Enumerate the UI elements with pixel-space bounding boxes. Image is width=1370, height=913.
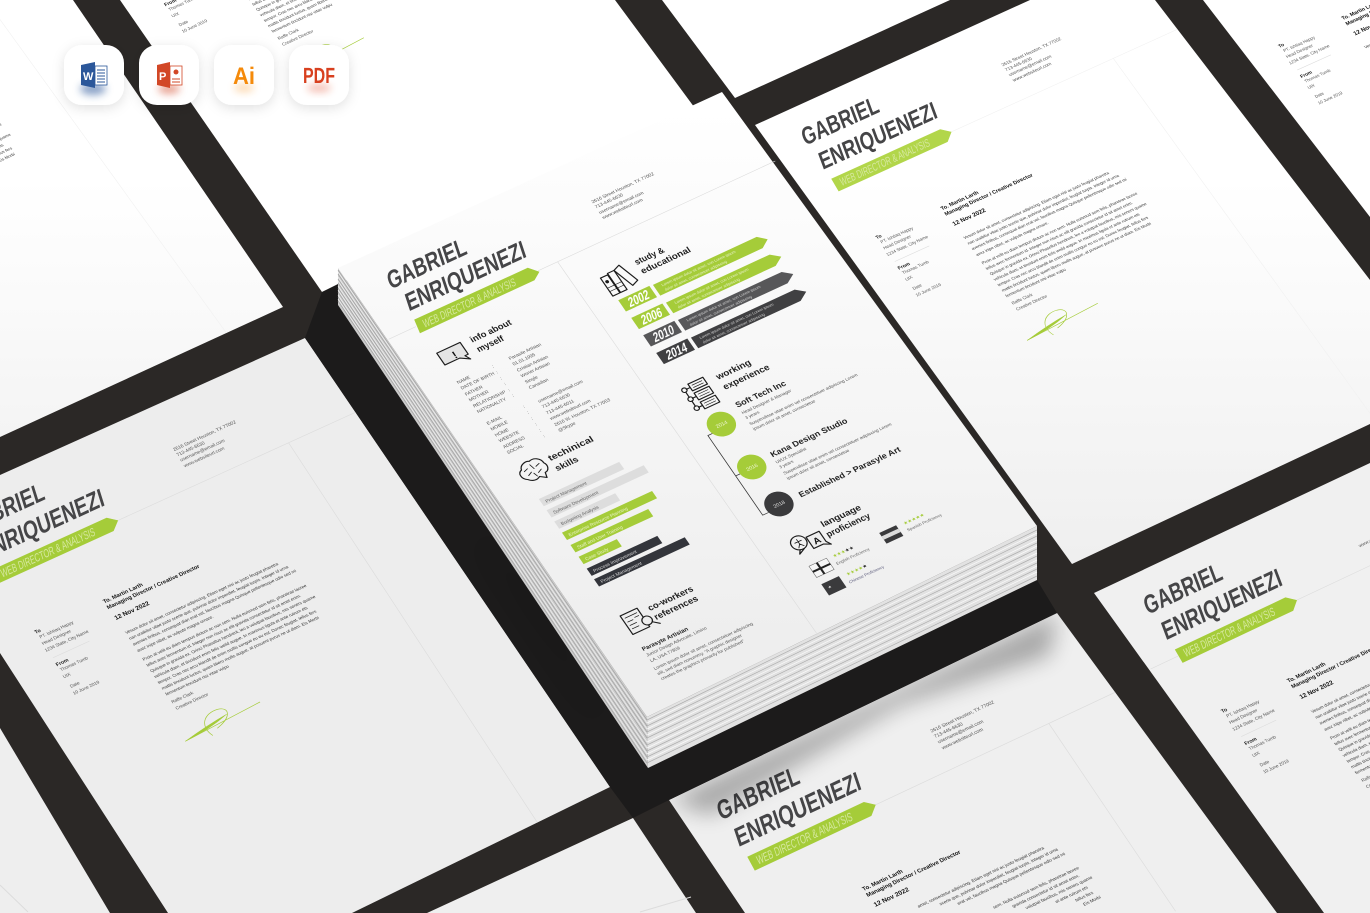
personal details list: NATIONALITY [476, 397, 508, 414]
heading: info about myself [468, 317, 521, 354]
reference entry: Parasyte Artisian [640, 626, 689, 652]
letter sheet: left: 1234 State, City Name [44, 629, 90, 653]
icon: books [598, 262, 640, 296]
experience 2016: UI/UX Specialist [775, 447, 808, 465]
icon: speech bubble alert [437, 342, 471, 369]
letter sheet: top right: PT. Ishtiaq Happy [880, 226, 915, 245]
letter sheet: left [0, 351, 606, 913]
letter sheet: left: avez inipe nibet, ac vulpute magna ornare. [136, 615, 215, 653]
education timeline 2002: Lorem ipsum dolor sit amet, con Lorem ipsum [661, 249, 737, 288]
letter sheet: bottom right: 10 June 2019 [1262, 759, 1290, 775]
letter sheet: top right: 1234 State, City Name [886, 235, 929, 257]
heading: study and educational [632, 236, 693, 276]
contact details list: 713-445-6630 [541, 393, 571, 409]
contact details list [486, 373, 615, 456]
contact details list: @Skype [557, 421, 577, 433]
personal details list: MOTHER [468, 390, 490, 403]
letter sheet: bottom center: erat vel, faucibus magna Quisque pellentesque odio sed mi [956, 852, 1066, 906]
letter sheet: bottom center: To. Martin Larth [861, 868, 904, 892]
letter sheet: top right: vehicula diam, et tincidunt enim felis weild augue. In maximus ligula et ante rutrum ets [993, 212, 1141, 282]
letter sheet: top right: To. Martin Larth [939, 190, 980, 211]
education timeline 2014: 2014 [664, 340, 689, 363]
experience 2016: Suspendisse vitae enim vel consectetuer adipiscing Lorem [783, 422, 893, 476]
letter sheet: top right: username@email.com [1008, 54, 1053, 77]
contact address [590, 172, 666, 221]
contact address: www.websiteurl.com [601, 198, 644, 221]
role banner: WEB DIRECTOR & ANALYSIS [421, 276, 517, 330]
letter sheet: bottom center [706, 628, 1244, 913]
letter sheet: top right: Raffe Clark [1011, 293, 1034, 306]
letter sheet: top left: UIX [171, 12, 181, 19]
education timeline 2002 [618, 233, 772, 313]
letter sheet: top left: Creative Director [281, 29, 315, 47]
letter sheet: bottom right: UIX [1251, 751, 1261, 758]
name title: GABRIEL [383, 232, 470, 295]
letter sheet: left: Quisque in gravida ex. Orinci Phasellus hendrerit, leo a volutpat faucibus, mis seners quame [149, 594, 317, 674]
language: spanish [879, 506, 943, 544]
icon: document search [620, 604, 660, 636]
letter sheet: top right: www.websiteurl.com [1011, 62, 1053, 83]
reference entry: Junior Design Advocate, Limino [645, 626, 708, 658]
name title [376, 212, 536, 318]
personal details list: Cristian Artisian [516, 355, 549, 373]
letter sheet: left: From [54, 657, 70, 668]
heading: language proficiency [817, 501, 873, 539]
language: spanish: ★★★★★ [902, 512, 926, 526]
letter sheet: bottom center: volutpat faucibus, mis seners quame [1025, 875, 1094, 911]
resume content [350, 105, 1033, 714]
skill bars: Software Development [552, 491, 600, 515]
letter sheet: bottom right: To. Martin Larth [1286, 661, 1327, 684]
letter sheet: bottom center: Managing Director / Creative Director [865, 849, 962, 898]
contact details list: MOBILE [490, 420, 509, 432]
letter sheet: bottom right: GABRIEL [1140, 557, 1226, 620]
letter sheet: left: vehicula diam, et tincidunt enim felis weild augue. In maximus ligula et ante rutrum ets [153, 606, 309, 679]
letter sheet: bottom center: WEB DIRECTOR & ANALYSIS [755, 810, 854, 867]
reference entry: creates the graphics primarily for published" [660, 639, 746, 681]
skill bars: Project Management [600, 561, 643, 584]
letter sheet: top right: avez inipe nibet, ac vulpute magna ornare. [975, 221, 1050, 257]
education timeline 2006 [631, 250, 786, 330]
letter sheet: far top right: Head Designer [1285, 43, 1315, 59]
education timeline 2010: 2010 [651, 322, 676, 346]
personal details list: Woner Artisian [520, 361, 551, 379]
personal details list: DATE OF BIRTH [460, 371, 496, 391]
letter sheet: left: 2616 Street Houston, TX 77002 [172, 420, 237, 452]
letter sheet: left: 713-445-6630 [176, 441, 206, 458]
stack shadow on surrounding sheets [480, 540, 1057, 815]
letter sheet: left: mattis tincidunt luctus, quam libero mollis augue, at posuere purus ne ut diam. Eis Morbi [161, 616, 320, 691]
letter sheet: top right: avenies finibus, consequat dian erat vel, faucibus magna Quisque pellentesque odio sed mi [971, 177, 1128, 251]
letter sheet: top right: From [896, 261, 912, 271]
contact address: username@email.com [598, 191, 645, 215]
letter sheet: left: Thomas Tumb [59, 656, 89, 672]
letter sheet: bottom right: Date [1259, 760, 1271, 768]
heading: language proficiency: proficiency [824, 511, 873, 539]
personal details list [456, 342, 563, 414]
contact details list: ADDRESS [502, 436, 526, 450]
letter sheet: far top right: 10 June 2019 [1317, 91, 1344, 106]
education timeline 2002: 2002 [626, 287, 651, 311]
heading: study and educational: educational [638, 245, 693, 276]
personal details list: : [495, 370, 499, 375]
letter sheet: top right: To [874, 233, 883, 240]
skill bars: Process Improvement [593, 550, 638, 574]
language: chinese: ★★★★★ [845, 563, 868, 577]
role banner [412, 265, 542, 333]
personal details list: RELATIONSHIP [472, 390, 507, 409]
letter sheet: top right: 12 Nov 2022 [951, 207, 987, 227]
letter sheet: left: Proin at velit eu diam tempus dictum ac non sem. Nulla euismod sem felis, pharetrae laoree [142, 583, 308, 662]
letter sheet: left: username@email.com [179, 438, 226, 463]
letter sheet: top right: tellus avec fermentum id. Integer non risus ac elit gravida consectetur id sit amet enim. [985, 201, 1134, 271]
letter sheet: top right: UIX [904, 275, 914, 282]
education timeline 2006: Lorem ipsum dolor sit amet, con Lorem ipsum [674, 267, 750, 305]
experience 2014: 3 years [744, 410, 761, 420]
letter sheet: top right: ENRIQUENEZI [815, 97, 941, 175]
heading: co-workers references [645, 584, 701, 622]
education timeline 2010: Lorem ipsum dolor sit amet, con Lorem ipsum [686, 285, 762, 323]
letter sheet: bottom right: ENRIQUENEZI [1158, 563, 1286, 645]
skill bars: Enterprise Resource Planning [568, 507, 629, 538]
personal details list: : [511, 394, 515, 398]
contact address: 2616 Street Houston, TX 77002 [591, 172, 655, 205]
letter sheet: top right: 713-445-6630 [1004, 57, 1033, 72]
letter sheet: bottom right: PT. Ishtiaq Happy [1225, 699, 1261, 719]
letter sheet: far top right: PT. Ishtiaq Happy [1282, 35, 1317, 53]
letter sheet: top right: nan uraibitur vitae justo scerie que, pulvinar dolor imperdiet, feugiat turpis. Integer id urna [967, 173, 1120, 246]
contact details list: E-MAIL [486, 415, 503, 426]
letter sheet: left: Head Designer [41, 629, 73, 646]
letter sheet: top right: 10 June 2019 [915, 283, 942, 298]
letter sheet: left: tellus avec fermentum id. Integer non risus ac elit gravida consectetur id sit amet enim. [146, 594, 302, 668]
experience 2016: 2016 [745, 462, 759, 472]
letter sheet: bottom center: sem. Nulla euismod sem felis, pharetrae laoree [992, 866, 1081, 910]
letter sheet: bottom right: 1234 State, City Name [1232, 708, 1276, 732]
letter sheet: left: UIX [62, 672, 72, 679]
experience 2016: ipsum dolor sit amet, consectetue [786, 448, 851, 481]
heading: working experience: working [713, 357, 753, 382]
experience 2018 [759, 437, 907, 521]
personal details list: FATHER [464, 385, 484, 397]
contact details list: : [530, 417, 534, 421]
heading: study and educational: study & [632, 245, 666, 267]
experience 2014: Suspendisse vitae enim vel consectetuer adipiscing Lorem [749, 373, 859, 427]
letter sheet: bottom center: ENRIQUENEZI [731, 766, 864, 853]
letter sheet: top left: 10 June 2019 [181, 19, 209, 34]
letter sheet: bottom right [1144, 540, 1370, 788]
reference entry: LA, USA 77809 [649, 646, 681, 663]
letter sheet: left: 12 Nov 2022 [113, 600, 151, 621]
contact address: 713-445-6630 [594, 193, 624, 210]
letter sheet: bottom center: gravida consectetur id sit amet enim. [1011, 873, 1081, 909]
reference entry: Lorem ipsum dolor sit amet, consectetuer adipiscing [653, 622, 754, 671]
letter sheet: bottom center: amet, consectetur adipiscing. Etiam eget nisi ac justo feugiat pharetra [917, 846, 1046, 909]
letter sheet: far top right: 1234 State, City Name [1288, 44, 1331, 66]
personal details list: : [491, 364, 495, 369]
badge: PowerPoint: P [159, 71, 166, 83]
file format badges [64, 45, 349, 105]
badge: PowerPoint [139, 45, 199, 105]
education timeline 2014: dolor sit amet, consectetuer adipiscing [702, 312, 766, 345]
badge: Illustrator [214, 45, 274, 105]
letter sheet: top right: Proin at velit eu diam tempus dictum ac non sem. Nulla euismod sem felis, pharetrae laoree [981, 191, 1139, 266]
letter sheet: left: Vesum dolor sit amet, consectetur adipiscing. Etiam eget nisi ac justo feugiat pharetra [124, 562, 280, 635]
letter sheet: top right: GABRIEL [798, 91, 882, 151]
personal details list: : [499, 376, 503, 381]
contact details list: username@email.com [537, 379, 584, 404]
letter sheet: top right: 2616 Street Houston, TX 77002 [1001, 37, 1063, 67]
letter sheet: top left: fermentum tincidunt nisi vitae vulpu [271, 2, 334, 34]
heading: technical skills [546, 434, 603, 473]
name title: ENRIQUENEZI [402, 235, 529, 317]
letter sheet: bottom right: 12 Nov 2022 [1298, 679, 1335, 700]
paper stack sides [338, 268, 1037, 768]
letter sheet: bottom center: username@email.com [937, 719, 985, 745]
language: english: ★★★★★ [832, 545, 855, 559]
badge: PDF: PDF [303, 63, 335, 88]
letter sheet: top right: Thomas Tumb [901, 260, 930, 276]
experience 2016 [732, 397, 896, 496]
letter sheet: left: To [33, 627, 42, 635]
letter sheet: left: Date [69, 681, 81, 689]
letter sheet: left: nan uraibitur vitae justo scerie que, pulvinar dolor imperdiet, feugiat turpis. Integer id urna [128, 565, 290, 641]
personal details list: Canadian [528, 378, 550, 390]
letter sheet: bottom center: tellus fers [1074, 891, 1094, 903]
letter sheet: bottom center: 713-445-6630 [933, 722, 964, 739]
education timeline 2002: dolor sit amet, consectetuer adipiscing [664, 260, 728, 292]
contact details list: 2616 W. Houston, TX 77003 [553, 398, 612, 427]
education timeline 2006: dolor sit amet, consectetuer adipiscing [677, 277, 741, 310]
letter sheet: top right: Managing Director / Creative Director [943, 172, 1034, 217]
heading: technical skills: techinical [546, 434, 596, 463]
letter sheet: top right: WEB DIRECTOR & ANALYSIS [838, 136, 932, 188]
letter sheet: left: tempor. Cras nec arcu blandit de enim mollis congue eu eu est. Donec feugiat, tellus fers [157, 609, 317, 685]
reference entry [639, 601, 761, 681]
letter sheet: top right: Head Designer [882, 234, 913, 251]
letter sheet: left: www.websiteurl.com [182, 446, 226, 469]
letter sheet: top right: fermentum tincidunt nisi vitae vulpu [1005, 267, 1067, 298]
letter sheet: far top right: UIX [1307, 83, 1316, 90]
experience 2018: 2018 [772, 499, 786, 509]
letter sheet: left: Creative Director [175, 692, 210, 711]
letter sheet: bottom center: GABRIEL [713, 760, 803, 826]
letter sheet: bottom center: 2616 Street Houston, TX 77002 [930, 700, 996, 734]
icon: language bubbles [787, 526, 831, 559]
letter sheet: top right: Quisque in gravida ex. Orinci Phasellus hendrerit, leo a volutpat faucibus, mis seners quame [989, 202, 1148, 277]
letter sheet: left: Managing Director / Creative Director [106, 563, 201, 610]
contact details list: 713-445-6011 [545, 399, 575, 416]
personal details list: : [503, 382, 507, 386]
icon: brain [515, 455, 553, 486]
experience connector [708, 433, 769, 515]
heading: working experience: experience [721, 362, 772, 392]
badge: Word [64, 45, 124, 105]
education timeline 2006: 2006 [639, 305, 664, 328]
letter sheet: left: WEB DIRECTOR & ANALYSIS [0, 525, 97, 580]
contact details list: SOCIAL [506, 444, 525, 455]
icon: workflow [680, 377, 720, 413]
letter sheet: top right [791, 0, 1370, 552]
icon: language bubbles: A [810, 534, 823, 546]
language: chinese: Chinese Proficiency [848, 565, 885, 585]
letter sheet: top left: Raffe Clark [277, 28, 300, 41]
heading: technical skills: skills [553, 454, 580, 473]
letter sheet: far top right: To [1277, 42, 1286, 49]
letter sheet: left: PT. Ishtiaq Happy [39, 620, 75, 640]
letter sheet: bottom center: www.websiteurl.com [940, 727, 985, 751]
badge: Word: W [83, 71, 94, 83]
contact details list: WEBSITE [498, 430, 521, 443]
letter sheet: bottom right: Thomas Tumb [1248, 735, 1277, 751]
letter sheet: left: avenies finibus, consequat dian erat vel, faucibus magna Quisque pellentesque odio sed mi [132, 569, 297, 647]
skill bars: Staff and User Training [576, 525, 624, 550]
letter sheet: top left: Date [178, 20, 190, 27]
letter sheet: far top right: Date [1314, 92, 1325, 99]
letter sheet: far top right: Thomas Tumb [1304, 69, 1332, 84]
letter sheet: top right: tempor. Cras nec arcu blandit de enim mollis congue eu eu est. Donec feugiat, tellus fers [997, 216, 1149, 287]
letter sheet: left: Raffe Clark [171, 691, 195, 705]
contact details list: www.websiteurl.com [549, 399, 592, 422]
experience 2014: Soft Tech Inc [733, 379, 788, 409]
letter sheet: bottom center: 12 Nov 2022 [872, 886, 911, 908]
heading: co-workers references: references [652, 593, 700, 622]
education timeline 2014: Lorem ipsum dolor sit amet, con Lorem ipsum [699, 302, 775, 340]
letter sheet: top left [164, 0, 364, 50]
contact details list: HOME [494, 428, 510, 438]
badge: Illustrator: Ai [233, 63, 255, 90]
language: chinese [821, 558, 885, 595]
letter sheet: bottom right: To [1220, 706, 1229, 714]
letter sheet: left: To. Martin Larth [102, 582, 144, 605]
language: english: English Proficiency [835, 547, 871, 566]
personal details list: NAME [456, 375, 472, 385]
letter sheet: far top right [1276, 0, 1370, 106]
letter sheet: left: 10 June 2019 [72, 680, 101, 696]
education timeline 2010: dolor sit amet, consectetuer adipiscing [689, 295, 753, 327]
personal details list: Single [524, 375, 539, 385]
experience 2014: ipsum dolor sit amet, consectetue [752, 399, 817, 432]
experience 2014: Head Designer & Manager [741, 388, 793, 415]
skill bars: Project Management [545, 481, 588, 504]
language: spanish: Spanish Proficiency [906, 513, 943, 533]
letter sheet: bottom center: Eis Morbi [1082, 895, 1102, 907]
reference entry: elit, sed diam nonummy. "A graphic designer [656, 633, 744, 676]
letter sheet: top right: mattis tincidunt luctus, quam libero mollis augue, at posuere purus ne ut diam. Eis Morbi [1001, 222, 1152, 293]
language: english [808, 540, 872, 577]
letter sheet: bottom center: et ante rutrum ets [1054, 885, 1089, 904]
letter sheet: far top right: From [1299, 69, 1314, 79]
letter sheet: bottom right: From [1243, 736, 1258, 746]
contact details list: : [522, 405, 526, 409]
personal details list: Parasite Artisian [508, 342, 543, 361]
heading: info about myself: info about [468, 317, 514, 344]
language: chinese: ★ [827, 584, 833, 590]
contact details list: : [534, 422, 538, 427]
letter sheet: bottom right: WEB DIRECTOR & ANALYSIS [1182, 605, 1277, 660]
experience 2018: Established > Parasyle Art [797, 445, 903, 499]
contact details list: : [542, 434, 546, 438]
letter sheet: bottom right: Head Designer [1228, 708, 1259, 725]
letter sheet: top right: Date [912, 283, 923, 291]
skill bars: Case Study [584, 547, 610, 562]
heading: info about myself: myself [474, 333, 506, 354]
letter sheet: top right: Creative Director [1015, 294, 1049, 312]
contact details list: : [538, 428, 542, 433]
personal details list: 01.01.1995 [512, 353, 537, 367]
experience 2016: Kana Design Studio [768, 416, 849, 459]
letter sheet: top right: Vesum dolor sit amet, consectetur adipiscing. Etiam eget nisi ac justo feugiat pharetra [963, 171, 1111, 240]
education timeline 2010 [643, 268, 797, 348]
heading: working experience [713, 352, 772, 392]
heading: co-workers references: co-workers [645, 584, 695, 613]
education timeline 2014 [656, 285, 810, 365]
letter sheet: bottom center: scerie que, pulvinar dolor imperdiet, feugiat turpis. Integer id urna [938, 847, 1059, 907]
skill bars: Budgeting Analysis [560, 505, 600, 526]
icon: speech bubble alert: ! [450, 350, 460, 361]
experience 2014: 2014 [714, 419, 729, 429]
contact details list: : [526, 410, 530, 415]
personal details list: : [507, 388, 511, 393]
experience 2014 [700, 352, 862, 447]
badge: PDF [289, 45, 349, 105]
heading: language proficiency: language [818, 502, 863, 529]
resume top sheet [338, 92, 1037, 717]
letter sheet: far left [0, 20, 227, 334]
skill bars [539, 454, 696, 587]
letter sheet: left: fermentum tincidunt nisi vitae vulpu [165, 664, 230, 697]
experience 2016: 3 years [778, 460, 795, 470]
